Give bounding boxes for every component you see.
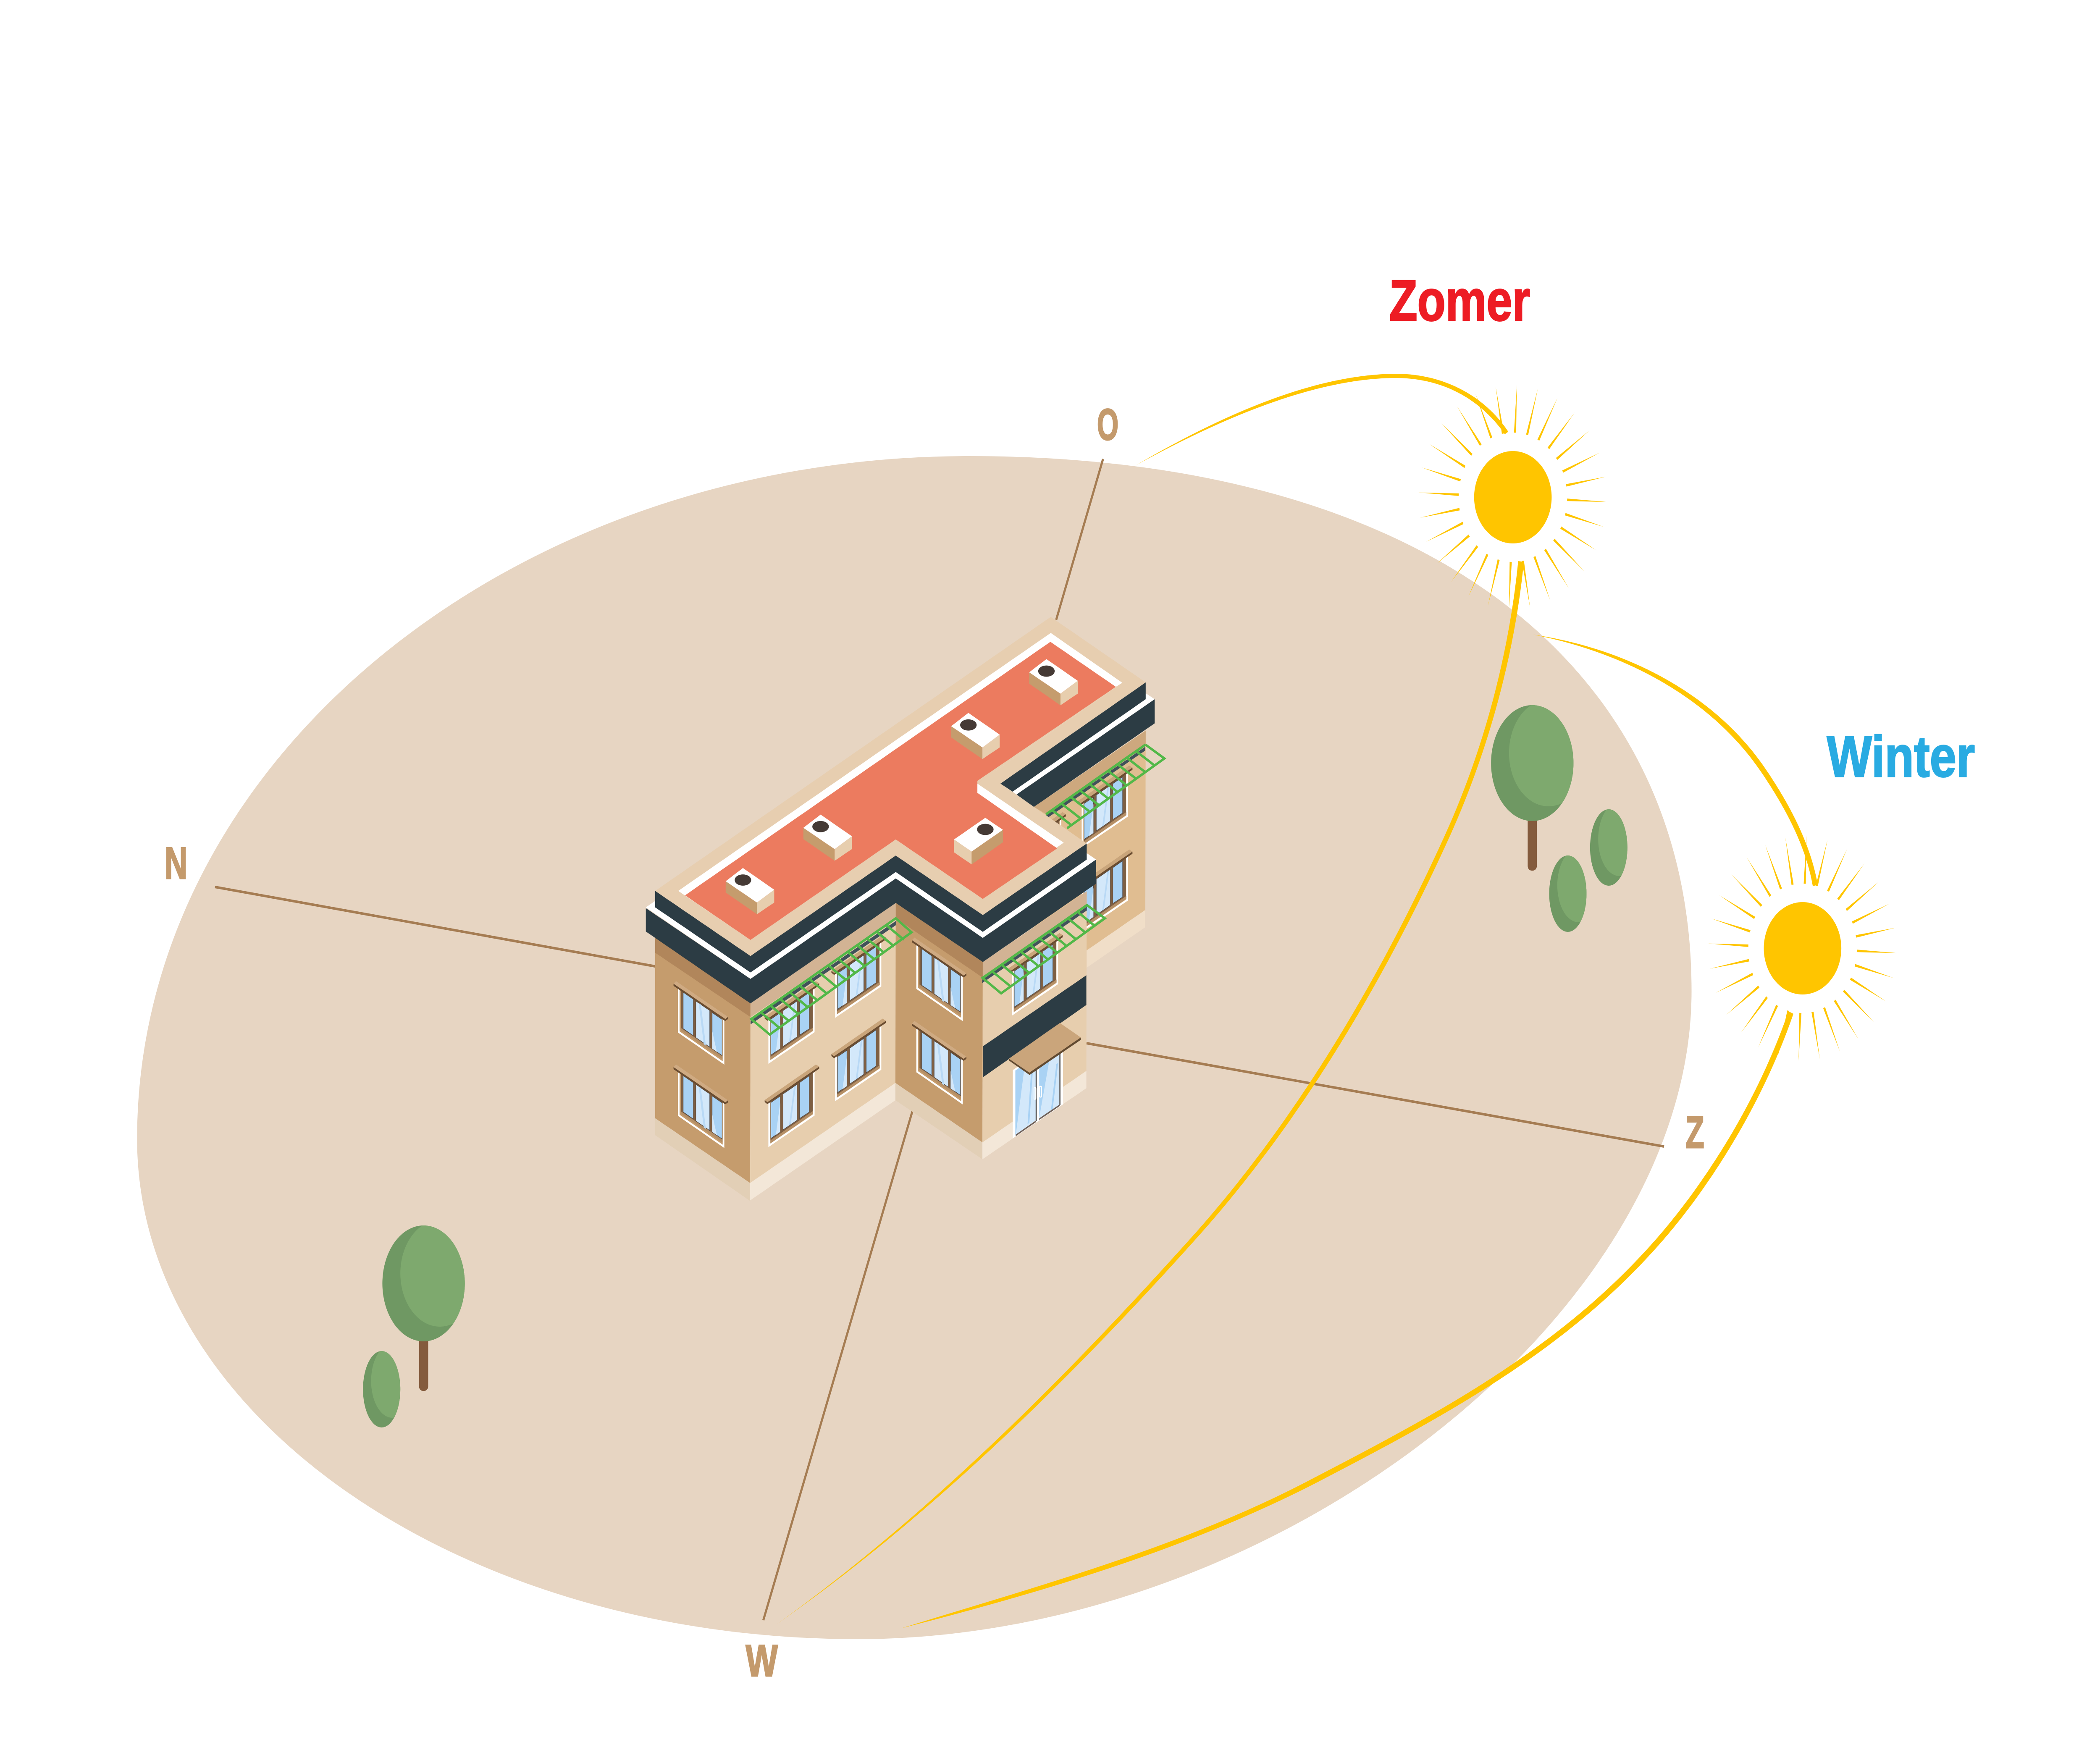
heading: Winter: Winter [1827, 724, 1975, 789]
summer sun path afternoon arc [776, 561, 1524, 1624]
back wing windows [1011, 766, 1132, 931]
icon: large tree [1491, 700, 1588, 871]
icon: small bush left [363, 1344, 413, 1427]
winter sun path morning arc [1533, 635, 1818, 886]
rooftop unit 1 [726, 868, 774, 914]
ground ellipse [137, 456, 1692, 1639]
compass label N: N [165, 838, 187, 888]
entrance door with canopy [1009, 1023, 1081, 1139]
main walls [655, 891, 1087, 1201]
line north [215, 887, 655, 966]
roof [646, 617, 1155, 1003]
compass label W: W [746, 1636, 778, 1686]
building [646, 617, 1164, 1201]
tree group left [363, 1220, 479, 1427]
icon: small bush lower [1549, 848, 1600, 932]
windows front left face [674, 981, 728, 1147]
compass lines [215, 459, 1664, 1620]
icon: large tree left [382, 1220, 479, 1391]
icon: winter sun [1708, 836, 1897, 1061]
summer sun path morning arc [1136, 374, 1508, 465]
window fourth face [1008, 933, 1063, 1014]
icon: small bush upper [1590, 802, 1641, 886]
line east [1056, 459, 1103, 620]
heading: Zomer: Zomer [1389, 268, 1530, 333]
rooftop unit 3 [951, 713, 1000, 759]
compass label Z: Z [1685, 1107, 1704, 1157]
back wing green pergola [1046, 745, 1164, 828]
back wing walls [1034, 731, 1146, 968]
compass label O: O [1097, 400, 1118, 449]
line south [1087, 1043, 1664, 1147]
rooftop units [726, 659, 1078, 914]
green pergola right [982, 905, 1105, 993]
rooftop unit 2 [803, 815, 852, 861]
green pergola left [751, 918, 911, 1034]
icon: summer sun [1418, 385, 1607, 610]
windows second face [765, 935, 886, 1146]
windows third face [912, 938, 966, 1103]
line west [763, 1111, 912, 1620]
tree group right [1491, 700, 1641, 932]
winter sun path afternoon arc [901, 1011, 1793, 1628]
rooftop unit 5 [954, 818, 1003, 864]
rooftop unit 4 [1029, 659, 1078, 705]
